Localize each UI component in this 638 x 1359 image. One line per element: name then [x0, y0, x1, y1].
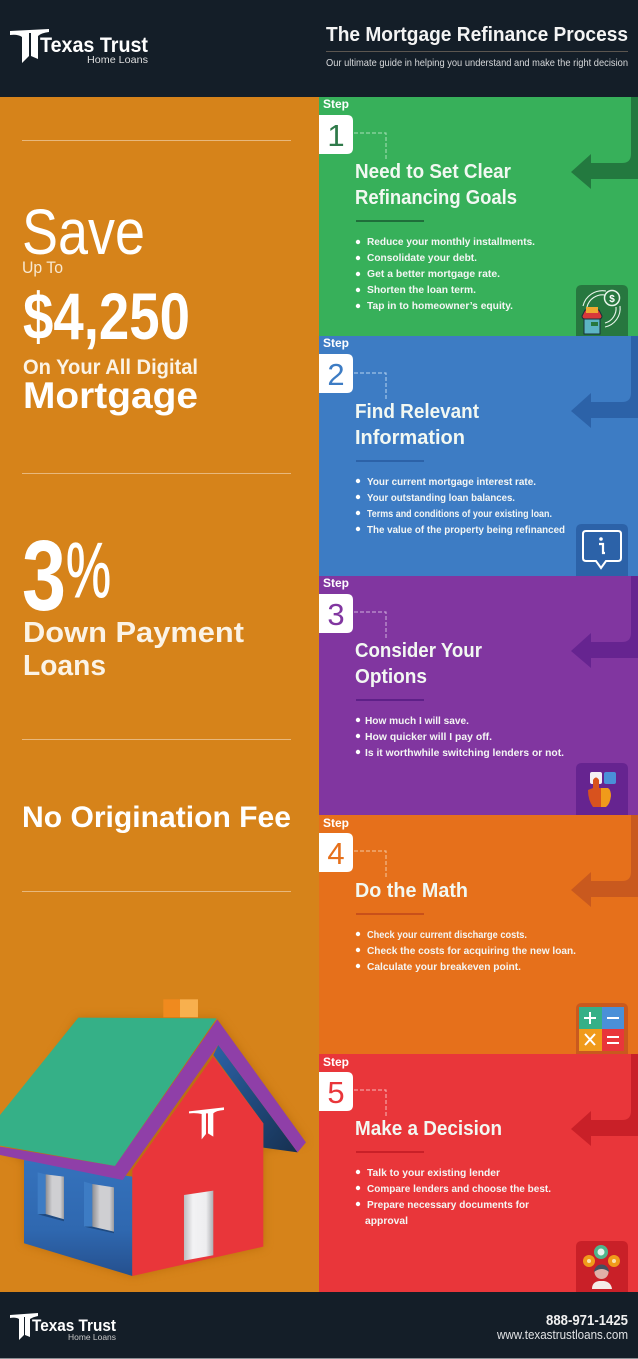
footer — [0, 1292, 638, 1359]
bullet list: Compare lenders and choose the best. — [367, 1183, 551, 1195]
blue side wall — [24, 1160, 132, 1276]
no origination fee: No Origination Fee — [22, 801, 291, 834]
heading: Consider Your — [355, 640, 482, 662]
bullet list: Reduce your monthly installments. — [367, 236, 535, 248]
heading: Refinancing Goals — [355, 187, 517, 209]
phone number: 888-971-1425 — [546, 1312, 628, 1329]
bullet list — [356, 929, 576, 973]
bullet list: Prepare necessary documents for — [367, 1199, 529, 1211]
icon: calculator — [576, 1003, 628, 1054]
icon: info bubble — [576, 524, 628, 576]
door — [184, 1191, 213, 1261]
heading — [355, 640, 482, 688]
bullet list: Terms and conditions of your existing loan. — [367, 508, 552, 520]
bullet list — [356, 476, 565, 536]
save offer — [22, 196, 198, 416]
logo mark on wall — [189, 1107, 224, 1139]
step 1 panel — [319, 97, 638, 336]
logo: Texas Trust — [40, 34, 148, 57]
save offer: On Your All Digital — [23, 356, 198, 379]
arrow — [571, 1054, 638, 1146]
bullet list: Check the costs for acquiring the new loan. — [367, 945, 576, 957]
bullet list: Is it worthwhile switching lenders or not. — [365, 747, 564, 759]
number badge: 2 — [327, 357, 345, 392]
heading: Options — [355, 666, 427, 688]
heading — [355, 401, 479, 449]
step 4 panel — [319, 815, 638, 1054]
footer logo: Texas Trust — [32, 1316, 116, 1335]
number badge — [319, 1072, 353, 1111]
bullet list: Consolidate your debt. — [367, 252, 477, 264]
purple trim — [0, 1019, 306, 1180]
green roof — [0, 1018, 217, 1166]
footer logo: Home Loans — [68, 1332, 116, 1342]
number badge — [319, 354, 353, 393]
step label: Step — [323, 97, 349, 111]
heading: Need to Set Clear — [355, 161, 511, 183]
number badge: 3 — [327, 597, 345, 632]
number badge — [319, 594, 353, 633]
icon: hand choosing — [576, 763, 628, 815]
number badge — [319, 833, 353, 872]
header — [0, 0, 638, 97]
logo — [10, 29, 148, 66]
arrow — [571, 97, 638, 189]
bullet list — [356, 715, 564, 759]
save offer: Save — [22, 196, 145, 268]
bullet list — [356, 236, 535, 312]
number badge: 1 — [327, 118, 345, 153]
step label: Step — [323, 576, 349, 590]
bullet list: Check your current discharge costs. — [367, 929, 527, 941]
bullet list: Calculate your breakeven point. — [367, 961, 521, 973]
heading — [355, 161, 517, 209]
icon: decision person — [576, 1241, 628, 1292]
bullet list: How quicker will I pay off. — [365, 731, 492, 743]
step 2 panel — [319, 336, 638, 576]
save offer: Mortgage — [23, 375, 198, 416]
save offer: $4,250 — [23, 279, 190, 353]
house illustration — [0, 999, 306, 1276]
down payment offer: 3 — [22, 520, 66, 632]
heading: Find Relevant — [355, 401, 479, 423]
icon: store and coin — [576, 285, 628, 336]
step label: Step — [323, 1055, 349, 1069]
step label: Step — [323, 816, 349, 830]
left panel: offers — [0, 97, 319, 1292]
step 5 panel — [319, 1054, 638, 1292]
down payment offer — [22, 520, 244, 682]
step label: Step — [323, 336, 349, 350]
title: The Mortgage Refinance Process — [326, 24, 628, 46]
save offer: Up To — [22, 258, 63, 277]
heading: Do the Math — [355, 880, 468, 902]
red front wall — [132, 1057, 263, 1276]
bullet list: The value of the property being refinanced — [367, 524, 565, 536]
windows — [46, 1174, 114, 1232]
bullet list — [356, 1167, 551, 1227]
website: www.texastrustloans.com — [496, 1328, 628, 1342]
bullet list: approval — [365, 1215, 408, 1227]
bullet list: Shorten the loan term. — [367, 284, 476, 296]
bullet list: Talk to your existing lender — [367, 1167, 500, 1179]
arrow — [571, 576, 638, 668]
logo: Home Loans — [87, 54, 148, 66]
heading: Information — [355, 427, 465, 449]
footer logo — [10, 1313, 116, 1342]
number badge: 5 — [327, 1075, 345, 1110]
arrow — [571, 815, 638, 907]
arrow — [571, 336, 638, 428]
chimney — [163, 999, 198, 1017]
step 3 panel — [319, 576, 638, 815]
bullet list: Your outstanding loan balances. — [367, 492, 515, 504]
bullet list: Get a better mortgage rate. — [367, 268, 500, 280]
down payment offer: Down Payment — [23, 617, 244, 649]
down payment offer: Loans — [23, 650, 106, 682]
down payment offer: % — [66, 526, 111, 614]
bullet list: Tap in to homeowner’s equity. — [367, 300, 513, 312]
bullet list: Your current mortgage interest rate. — [367, 476, 536, 488]
number badge — [319, 115, 353, 154]
heading: Make a Decision — [355, 1118, 502, 1140]
bullet list: How much I will save. — [365, 715, 469, 727]
icon: store and coin: $ — [609, 294, 615, 305]
number badge: 4 — [327, 836, 345, 871]
